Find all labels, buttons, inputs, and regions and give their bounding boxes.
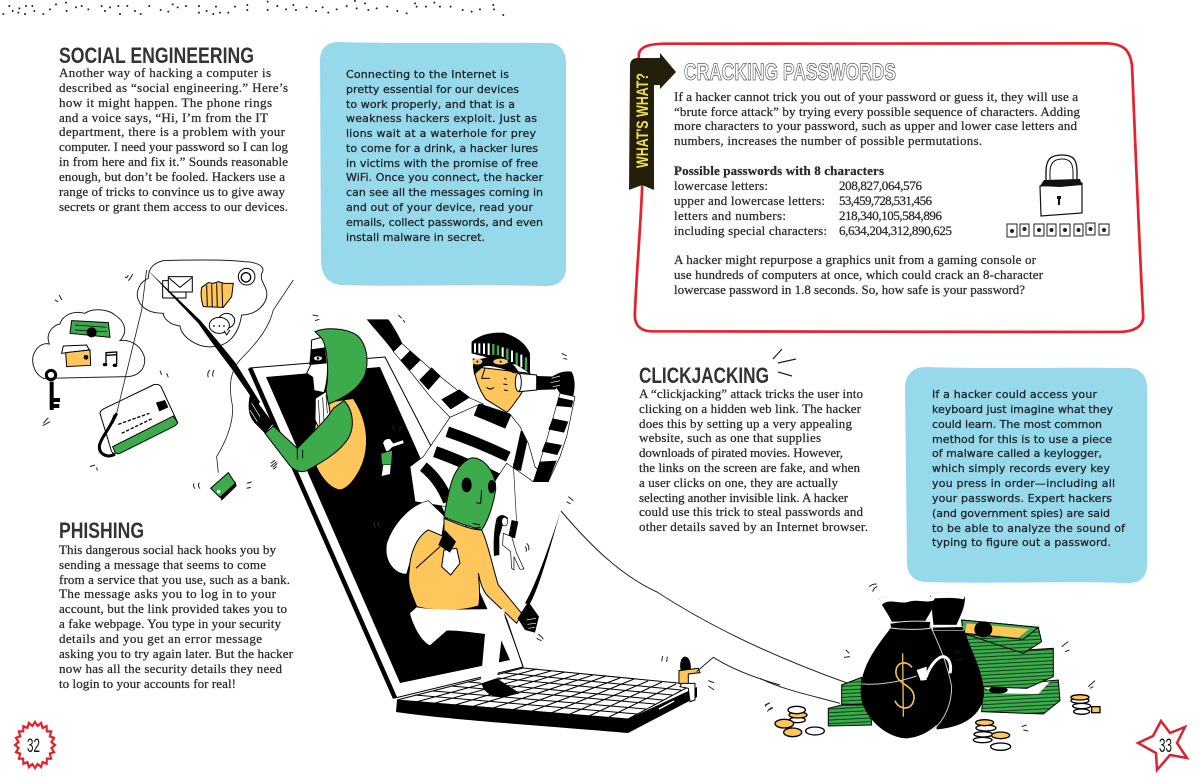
text: social engineering body: enough, but don’t be fooled. Hackers use a	[59, 169, 285, 184]
text: phishing body: details and you get an error message	[59, 631, 262, 646]
keyboard	[396, 668, 697, 733]
icon: folder	[201, 282, 233, 307]
heading: cracking passwords: CRACKING PASSWORDS	[684, 59, 896, 86]
stack: lower left bills	[828, 677, 872, 726]
blue note text: WiFi. Once you connect, the hacker	[346, 171, 543, 184]
page number badge: 32	[15, 722, 55, 768]
panel: blue note on internet weakness	[320, 42, 566, 286]
text: phishing body: from a service that you use, such as a bank.	[59, 572, 290, 587]
text: social engineering body: secrets or grant them access to our devices.	[59, 199, 288, 214]
text: clickjacking body: website, such as one that supplies	[639, 430, 821, 445]
table: possible passwords with 8 characters: letters and numbers:	[674, 208, 786, 223]
illustration: money bags and bills	[760, 584, 1100, 750]
thief body	[410, 404, 548, 507]
text: clickjacking body: A “clickjacking” attack tricks the user into	[639, 386, 863, 401]
icon: wallet	[62, 345, 91, 367]
table: possible passwords with 8 characters: 53,459,728,531,456	[839, 193, 932, 208]
rod line to green wallet	[217, 280, 293, 473]
table: possible passwords with 8 characters: upper and lowercase letters:	[674, 193, 825, 208]
text: phishing body: sending a message that seems to come	[59, 557, 266, 572]
text: social engineering body: how it might happen. The phone rings	[59, 95, 272, 110]
icon: envelope	[163, 277, 192, 298]
front money bag with dollar sign	[861, 594, 952, 738]
text: clickjacking body: other details saved by an Internet browser.	[639, 519, 868, 534]
lower line into bills	[760, 678, 840, 703]
text: phishing body: account, but the link provided takes you to	[59, 601, 287, 616]
text: social engineering body: computer. I need your password so I can log	[59, 139, 288, 154]
closing paragraph	[674, 252, 1044, 297]
green head	[444, 458, 496, 530]
icon: key	[46, 370, 60, 410]
thief head with mask and hat	[472, 333, 530, 412]
blue note text: can see all the messages coming in	[346, 186, 543, 199]
table: possible passwords with 8 characters: Possible passwords with 8 characters	[674, 163, 884, 178]
text: social engineering body	[59, 65, 288, 214]
hooded hacker	[249, 329, 367, 490]
panel: cracking passwords red frame	[629, 43, 1143, 332]
cloud: personal valuables	[33, 310, 145, 378]
blue note text: and out of your device, read your	[346, 201, 533, 214]
white sack	[386, 501, 445, 574]
heading: clickjacking: CLICKJACKING	[639, 363, 769, 388]
table: possible passwords with 8 characters: 6,634,204,312,890,625	[839, 223, 952, 238]
keylogger note text: If a hacker could access your	[932, 388, 1097, 401]
illustration: laptop	[250, 357, 697, 733]
table: possible passwords with 8 characters: 208,827,064,576	[839, 178, 922, 193]
coins	[775, 695, 1100, 750]
small hacker on laptop edge	[662, 656, 780, 710]
text: phishing body: to login to your accounts for real!	[59, 676, 236, 691]
white hook on bag	[926, 657, 951, 677]
green-headed hacker	[386, 458, 539, 697]
intro paragraph: numbers, increases the number of possible permutations.	[674, 133, 982, 148]
keylogger note text: could learn. The most common	[932, 418, 1102, 431]
decorative dots strip	[3, 1, 503, 15]
illustration: cloud scene with fishing rod and hook	[33, 260, 293, 501]
keylogger note text: method for this is to use a piece	[932, 433, 1112, 446]
text: clickjacking body	[639, 386, 868, 534]
blue note text: pretty essential for our devices	[346, 83, 519, 96]
black shoe	[482, 678, 520, 697]
keylogger note text: your passwords. Expert hackers	[932, 492, 1112, 505]
text: clickjacking body: the links on the screen are fake, and when	[639, 460, 860, 475]
text: social engineering body: and a voice says, “Hi, I’m from the IT	[59, 110, 268, 125]
blue note text: emails, collect passwords, and even	[346, 216, 543, 229]
keylogger note text: you press in order—including all	[932, 477, 1115, 490]
table: possible passwords with 8 characters: 218,340,105,584,896	[839, 208, 942, 223]
icon: cash	[70, 321, 110, 337]
icon: padlock with password characters	[1007, 155, 1109, 237]
text: phishing body: This dangerous social hack hooks you by	[59, 542, 276, 557]
blue note text: Connecting to the Internet is	[346, 68, 509, 81]
motion marks	[765, 584, 1095, 731]
intro paragraph	[674, 89, 1080, 148]
cloud: personal data	[137, 260, 267, 347]
text: social engineering body: department, there is a problem with your	[59, 124, 286, 139]
panel: blue note on keyloggers	[905, 367, 1147, 583]
intro paragraph: “brute force attack” by trying every possible sequence of characters. Adding	[674, 104, 1080, 119]
closing paragraph: use hundreds of computers at once, which could crack an 8-character	[674, 267, 1044, 282]
keylogger note text: typing to figure out a password.	[932, 536, 1111, 549]
icon: coin	[238, 268, 255, 285]
other figures on screen	[247, 315, 573, 697]
tiny green figure with binoculars	[381, 438, 403, 476]
page number badge: 32: 32	[27, 736, 40, 757]
closing paragraph: A hacker might repurpose a graphics unit from a gaming console or	[674, 252, 1037, 267]
text: phishing body: a fake webpage. You type in your security	[59, 616, 282, 631]
blue note text: install malware in secret.	[346, 231, 485, 244]
blue note text	[346, 68, 543, 244]
text: social engineering body: described as “social engineering.” Here’s	[59, 80, 288, 95]
back money bag	[930, 592, 984, 729]
closing paragraph: lowercase password in 1.8 seconds. So, how safe is your password?	[674, 282, 1025, 297]
text: clickjacking body: could use this trick to steal passwords and	[639, 504, 864, 519]
keylogger note text: keyboard just imagine what they	[932, 403, 1113, 416]
heading: social engineering: SOCIAL ENGINEERING	[59, 43, 254, 68]
page number badge: 33: 33	[1159, 736, 1172, 757]
ribbon: what's what: WHAT'S WHAT?	[633, 73, 652, 168]
text: social engineering body: Another way of hacking a computer is	[59, 65, 271, 80]
gloves and sack hand	[442, 548, 460, 575]
intro paragraph: If a hacker cannot trick you out of your password or guess it, they will use a	[674, 89, 1078, 104]
text: clickjacking body: a user clicks on one, they are actually	[639, 475, 838, 490]
yellow torso	[409, 518, 522, 623]
laptop screen thick left edge	[250, 368, 395, 698]
motion marks	[43, 274, 277, 489]
blue note text: to work properly, and that is a	[346, 98, 515, 111]
keylogger note text: to be able to analyze the sound of	[932, 522, 1126, 535]
keylogger note text	[932, 388, 1126, 549]
blue note text: to come for a drink, a hacker lures	[346, 142, 538, 155]
blue note text: weakness hackers exploit. Just as	[346, 112, 537, 125]
table: possible passwords with 8 characters	[674, 163, 952, 238]
text: clickjacking body: does this by setting up a very appealing	[639, 416, 852, 431]
text: clickjacking body: clicking on a hidden web link. The hacker	[639, 401, 862, 416]
motion marks	[247, 315, 573, 641]
text: phishing body: asking you to try again later. But the hacker	[59, 646, 294, 661]
icon: click rays	[773, 349, 796, 376]
icon: green wallet	[211, 473, 237, 501]
fishing rod	[146, 268, 260, 406]
striped thief	[367, 319, 575, 507]
keylogger note text: of malware called a keylogger,	[932, 447, 1102, 460]
text: clickjacking body: downloads of pirated movies. However,	[639, 445, 843, 460]
text: phishing body: now has all the security details they need	[59, 661, 282, 676]
blue note text: in victims with the promise of free	[346, 157, 538, 170]
table: possible passwords with 8 characters: including special characters:	[674, 223, 827, 238]
table: possible passwords with 8 characters: lowercase letters:	[674, 178, 768, 193]
thief long arm and glove	[367, 319, 483, 417]
text: social engineering body: range of tricks to convince us to give away	[59, 184, 286, 199]
heading: phishing: PHISHING	[59, 518, 144, 543]
page number badge: 33	[1138, 721, 1187, 770]
white pants	[410, 607, 505, 683]
intro paragraph: more characters to your password, such as upper and lower case letters and	[674, 118, 1078, 133]
ribbon: what's what	[629, 53, 676, 190]
icon: credit card	[100, 384, 178, 454]
blue note text: lions wait at a waterhole for prey	[346, 127, 536, 140]
keylogger note text: which simply records every key	[932, 462, 1110, 475]
keylogger note text: (and government spies) are said	[932, 507, 1110, 520]
thief raised arm	[533, 393, 575, 482]
fishing line and hook	[99, 270, 147, 456]
laptop screen bezel	[250, 357, 523, 698]
icon: music note	[103, 352, 117, 367]
text: phishing body	[59, 542, 294, 691]
hanging rope and girl	[494, 463, 524, 570]
text: social engineering body: in from here and fix it.” Sounds reasonable	[59, 154, 288, 169]
icon: chat bubbles	[209, 313, 235, 335]
stack: right bills	[962, 620, 1060, 714]
text: clickjacking body: selecting another invisible link. A hacker	[639, 490, 849, 505]
thief can and glove	[515, 371, 575, 396]
upper fishing line	[561, 511, 847, 683]
text: phishing body: The message asks you to log in to your	[59, 586, 277, 601]
fishing rod of green-headed hacker	[525, 512, 561, 605]
laptop screen black interior	[266, 367, 510, 683]
